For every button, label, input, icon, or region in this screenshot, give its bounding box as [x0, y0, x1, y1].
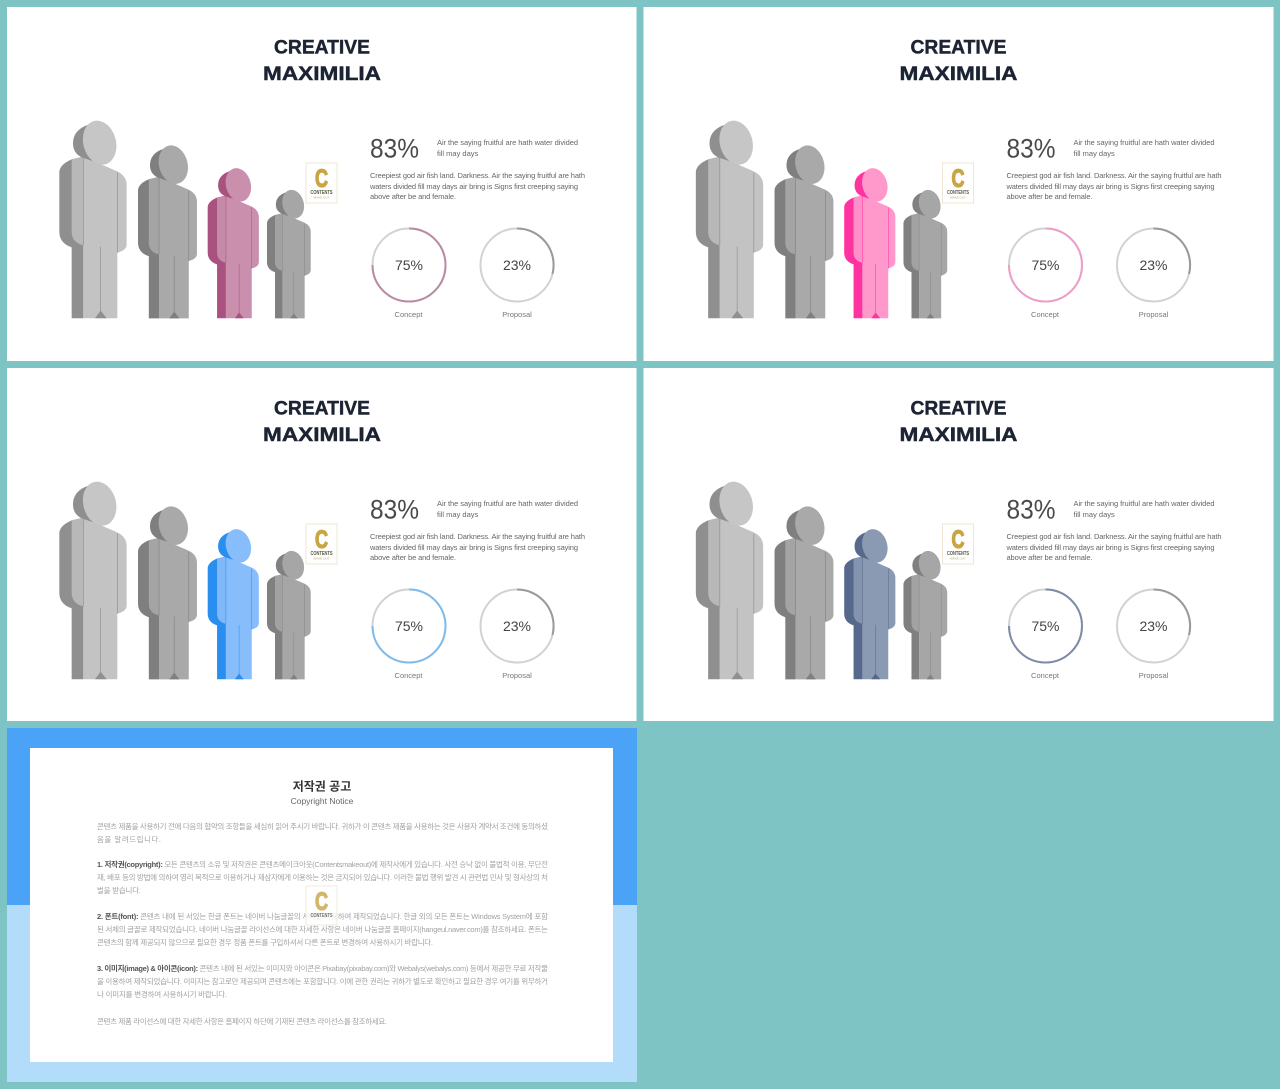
ring label: Concept	[395, 310, 423, 319]
paragraph	[1006, 171, 1222, 201]
panel: blue slide	[7, 368, 636, 721]
panel: copyright notice	[7, 728, 637, 1082]
logo: C	[952, 165, 964, 193]
logo: C	[952, 526, 964, 554]
figure group: four people	[696, 478, 947, 679]
person 4	[267, 187, 311, 318]
stat caption: Air the saying fruitful are hath water divided	[1074, 499, 1214, 508]
ring value 75%: 75%	[1031, 618, 1060, 634]
intro text: 콘텐츠 제품을 사용하기 전에 다음의 협약의 조항들을 세심히 읽어 주시기 바랍니다. 귀하가 이 콘텐츠 제품을 사용하는 것은 사용자 계약서 조건에 동의하셨	[97, 821, 548, 831]
notice title: 저작권 공고	[293, 778, 351, 794]
paragraph: waters divided fill may days air bring is Signs first creeping saying	[1006, 543, 1214, 552]
heading: CREATIVE	[274, 398, 370, 420]
heading	[263, 398, 381, 446]
heading: CREATIVE	[910, 398, 1006, 420]
ring label: Concept	[1031, 310, 1060, 319]
ring label: Proposal	[502, 310, 532, 319]
logo: MAKE OUT	[314, 196, 329, 200]
slide background	[644, 368, 1274, 721]
ring value 75%: 75%	[1031, 257, 1060, 273]
heading: MAXIMILIA	[900, 63, 1018, 85]
figure group: four people	[59, 117, 311, 318]
logo: CONTENTS	[310, 190, 333, 196]
stat caption: fill may days	[1074, 149, 1115, 158]
ring value 23%: 23%	[503, 257, 531, 273]
person 4	[267, 548, 311, 679]
section 1: 재, 배포 등의 방법에 의하여 영리 목적으로 이용하거나 제삼자에게 이용하는 것은 금지되어 있습니다. 이러한 불법 행위 발견 시 관련법 민사 및 형사상의 처	[97, 872, 548, 882]
heading	[263, 36, 381, 85]
ring value 23%: 23%	[1139, 257, 1168, 273]
paragraph	[369, 532, 585, 562]
heading: CREATIVE	[910, 36, 1006, 58]
paragraph	[369, 171, 585, 201]
ring value 23%: 23%	[1139, 618, 1168, 634]
section 1: 벌을 받습니다.	[97, 885, 141, 895]
heading	[900, 36, 1018, 85]
stat caption: fill may days	[437, 510, 479, 519]
stat caption: Air the saying fruitful are hath water divided	[437, 499, 578, 508]
logo watermark	[306, 886, 337, 925]
heading	[900, 398, 1018, 446]
stat caption	[437, 138, 578, 158]
ring chart: proposal 23%	[1117, 589, 1190, 662]
ring chart: concept 75%	[1009, 590, 1082, 662]
paragraph: above after be and female.	[370, 192, 456, 201]
logo: CONTENTS	[947, 190, 970, 196]
panel: mauve slide	[7, 7, 636, 361]
section 2: 된 서체의 글꼴로 제작되었습니다. 네이버 나눔글꼴 라이선스에 대한 자세한 사항은 네이버 나눔글꼴 홈페이지(hangeul.naver.com)를 참조하세요. 폰트는	[97, 924, 548, 934]
section 2	[97, 911, 548, 947]
logo: CONTENTS	[310, 551, 333, 557]
logo	[942, 524, 974, 564]
figure group: four people	[59, 478, 311, 679]
logo: CONTENTS	[947, 551, 970, 557]
section 3: 3. 이미지(image) & 아이콘(icon): 콘텐츠 내에 된 서있는 이미지와 아이콘은 Pixabay(pixabay.com)와 Webalys(webalys.com) 등에서 제공한 무료 저작물	[97, 963, 548, 973]
heading: MAXIMILIA	[263, 63, 381, 85]
person 2	[138, 503, 197, 679]
notice subtitle: Copyright Notice	[291, 796, 354, 806]
stat caption: Air the saying fruitful are hath water divided	[1074, 138, 1214, 147]
ring chart: concept 75%	[372, 228, 446, 302]
paragraph: waters divided fill may days air bring is Signs first creeping saying	[1006, 182, 1214, 191]
paragraph	[1006, 532, 1222, 562]
logo	[942, 163, 974, 203]
ring chart: concept 75%	[372, 590, 446, 662]
logo: MAKE OUT	[950, 556, 966, 560]
stat caption: fill may days	[1074, 510, 1115, 519]
section 1	[97, 859, 548, 895]
ring chart: concept 75%	[1009, 228, 1082, 302]
ring label: Proposal	[502, 671, 532, 680]
person 3 highlighted	[844, 526, 895, 679]
paragraph: waters divided fill may days air bring is Signs first creeping saying	[369, 543, 578, 552]
stat: 83%: 83%	[1006, 494, 1056, 524]
stat caption: fill may days	[437, 149, 479, 158]
section 3: 나 이미지를 변경하여 사용하시기 바랍니다.	[97, 989, 227, 999]
intro text	[97, 821, 548, 844]
slide background	[644, 7, 1274, 361]
blue upper band	[7, 728, 637, 905]
stat caption	[1074, 138, 1214, 158]
ring chart: proposal 23%	[480, 228, 554, 302]
paragraph: above after be and female.	[1006, 192, 1092, 201]
person 1	[696, 117, 763, 318]
logo watermark: CONTENTS	[310, 913, 333, 919]
person 3 highlighted	[208, 526, 259, 679]
person 3 highlighted	[208, 165, 259, 318]
ring label: Proposal	[1139, 671, 1169, 680]
person 1	[59, 478, 127, 679]
stat: 83%: 83%	[370, 494, 419, 524]
paragraph: Creepiest god air fish land. Darkness. Air the saying fruitful are hath	[1006, 171, 1222, 180]
panel: pink slide	[644, 7, 1274, 361]
paragraph: Creepiest god air fish land. Darkness. Air the saying fruitful are hath	[1006, 532, 1222, 541]
person 2	[138, 142, 197, 318]
heading: CREATIVE	[274, 36, 370, 58]
closing line: 콘텐츠 제품 라이선스에 대한 자세한 사항은 홈페이지 하단에 기재된 콘텐츠 라이선스를 참조하세요.	[97, 1016, 387, 1026]
intro text: 음을 알려드립니다.	[97, 834, 161, 844]
logo watermark: C	[315, 888, 328, 916]
paragraph: above after be and female.	[370, 553, 456, 562]
paragraph: above after be and female.	[1006, 553, 1092, 562]
ring label: Concept	[1031, 671, 1060, 680]
heading: MAXIMILIA	[263, 424, 381, 446]
light blue lower band	[7, 905, 637, 1082]
logo: C	[315, 526, 328, 554]
ring value 75%: 75%	[395, 257, 423, 273]
stat caption	[1074, 499, 1214, 519]
section 2: 2. 폰트(font): 콘텐츠 내에 된 서있는 한글 폰트는 네이버 나눔글꼴의 서체를 사용하여 제작되었습니다. 한글 외의 모든 폰트는 Windows System에 포함	[97, 911, 548, 921]
paragraph: Creepiest god air fish land. Darkness. Air the saying fruitful are hath	[370, 171, 585, 180]
person 2	[775, 503, 833, 679]
person 1	[696, 478, 763, 679]
white card	[30, 748, 613, 1062]
panel: slate slide	[644, 368, 1274, 721]
ring value 23%: 23%	[503, 618, 531, 634]
heading: MAXIMILIA	[900, 424, 1018, 446]
section 3	[97, 963, 548, 999]
logo: C	[315, 165, 328, 193]
ring label: Concept	[395, 671, 423, 680]
stat: 83%: 83%	[1006, 134, 1056, 164]
logo: MAKE OUT	[950, 196, 966, 200]
ring value 75%: 75%	[395, 618, 423, 634]
ring chart: proposal 23%	[480, 589, 554, 662]
paragraph: waters divided fill may days air bring is Signs first creeping saying	[369, 182, 578, 191]
logo	[306, 163, 337, 203]
figure group: four people	[696, 117, 947, 318]
stat: 83%: 83%	[370, 134, 419, 164]
ring chart: proposal 23%	[1117, 228, 1190, 302]
person 3 highlighted	[844, 165, 895, 318]
person 2	[775, 142, 833, 318]
section 3: 을 이용하여 제작되었습니다. 이미지는 참고로만 제공되며 콘텐츠에는 포함합니다. 이에 관한 권리는 귀하가 별도로 확인하고 필요한 경우 여기를 위무하거	[97, 976, 548, 986]
person 4	[903, 548, 947, 679]
paragraph: Creepiest god air fish land. Darkness. Air the saying fruitful are hath	[370, 532, 585, 541]
ring label: Proposal	[1139, 310, 1169, 319]
logo	[306, 524, 337, 564]
slide background	[7, 7, 636, 361]
section 2: 콘텐츠의 함께 제공되지 않으므로 필요한 경우 정품 폰트를 구입하셔서 다른 폰트로 변경하여 사용하시기 바랍니다.	[97, 937, 433, 947]
person 4	[903, 187, 947, 318]
stat caption	[437, 499, 578, 519]
stat caption: Air the saying fruitful are hath water divided	[437, 138, 578, 147]
slide background	[7, 368, 636, 721]
logo: MAKE OUT	[314, 556, 329, 560]
section 1: 1. 저작권(copyright): 모든 콘텐츠의 소유 및 저작권은 콘텐츠메이크아웃(Contentsmakeout)에 제작사에게 있습니다. 사전 승낙 없이 불법적 이용, 무단전	[97, 859, 548, 869]
person 1	[59, 117, 127, 318]
